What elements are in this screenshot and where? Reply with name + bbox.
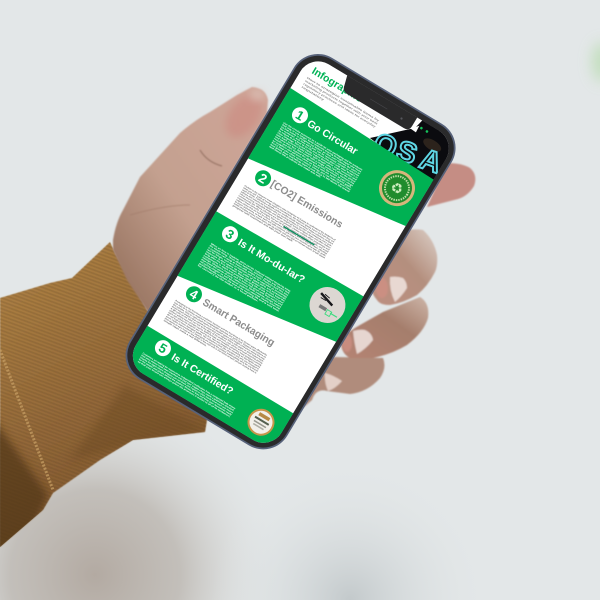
neon sign photo: O [369,127,401,165]
number 2 badge: 2 [256,170,270,187]
body text 3: product finally reaches the end of its working life and is sent back [198,262,280,313]
body text 3: When an item is modular, parts can be replaced without throwing away [210,242,292,293]
panel 4: smart packaging [164,286,274,374]
body text 2: running costs too. Where reductions are not yet possible, choose credible offset programmes and [238,194,331,252]
intro text [302,76,380,128]
body text 3: the whole thing. Think about batteries, screens, straps and covers that [209,244,290,295]
body text 5: Display the logos where shoppers can see them and explain in plain words what each one means [139,356,234,415]
body text 1: as suppliers and partners come on board with the same shared goals. [272,139,353,189]
body text 5: that your claims have been checked and that your supply chain meets a published standard. [141,354,235,412]
body text 2: Small changes across many items add up quickly and give you an honest reason to talk about [233,202,326,259]
body text 2: what you sell. Look at energy used in manufacture, the distance goods travel and how they are [242,186,336,244]
body text 4: Simple steps make a real difference. [163,319,208,348]
body text 3: listings. Shoppers respond well to items that grow with their needs and [202,256,284,307]
panel 2: co2 emissions [232,170,342,258]
body text 4: that wants to earn trust on the shelf, in the mail and in the home of each person buying from it. [164,317,258,375]
heading: smart packaging: Smart Packaging [200,296,277,349]
body text 1: and about the products you make and sell. [268,145,322,179]
intro text: regulatory practices and ideas for everyday [302,82,377,129]
body text 5: so that your brand can always prove the promises it makes to all of its customers. [137,360,231,419]
panel 1: go circular [248,88,434,226]
body text 1: and gives your marketing team a true story to tell about the brand [270,143,351,194]
body text 3 [197,242,292,315]
body text 5: Customers are looking for reassurance. Independent certification from a recognised body shows [142,352,237,411]
body text 3: last for longer, cost less to maintain and can be upgraded as technology [206,248,289,299]
body text 2: vague claims that are hard to check. Consumers and regulators are both paying closer attention [235,198,328,256]
body text 1 [268,122,364,196]
intro text: How to strategize sustainable items by [306,76,381,123]
finger three [303,357,384,408]
badge: recycle seal: ♻ [387,179,406,199]
number 3 badge: 3 [223,226,237,243]
phone screen [132,61,449,443]
badge: modular product photo [310,287,346,323]
neon sign photo: S [392,135,421,171]
body text 4: A QR code on the label can link to the story of the product, care advice and local recycling points [170,307,264,365]
body text 3: for recovery by the maker or a local partner. [197,264,259,303]
number 4 badge: 4 [187,286,201,303]
body text 3: that avoid the waste of early replacement. Good modular design makes [201,258,283,309]
badge: recycle seal [379,170,415,206]
body text 1: take-back schemes build loyalty with people who care about the planet [276,133,356,183]
neon sign photo: A [416,143,446,180]
fingertip behind phone top [427,163,475,207]
body text 4: Packaging is the first thing a customer touches and the first thing to be thrown away afterwards. [175,299,268,357]
body text 2 [232,184,337,262]
body text 2: Carbon is the measure most shoppers now recognise so it pays to understand the footprint of [244,184,336,242]
body text 1: Use the circular economy as a guide for your packaging and for products [283,122,364,172]
number 1 badge: 1 [293,107,307,124]
body text 1: so that waste is designed out before an item ever reaches the store or [280,125,361,176]
neon sign photo [370,120,449,184]
heading: go circular: Go Circular [305,118,360,157]
body text 1: clear language. Recycled inputs reduce demand for virgin resources and [277,131,358,182]
body text 2: used at home. Publishing a simple carbon number beside each product helps customers compare [241,188,334,246]
body text 4: Avoid mixed plastics that cannot be separated and replace fillers with paper or plant based foam. [171,305,265,363]
body text 2: explain them honestly. Set targets that can be tracked, report on progress in public, and avoid [237,196,330,254]
heading: is it modular: Is It Mo-du-lar? [236,237,307,286]
hand: palm and thumb [113,87,270,312]
body text 4: back and reduce the material you need to buy. Test new designs for durability so that lighter packs [168,311,262,369]
body text 1: to nature at the end of its life and share that plan with your buyers in [278,129,359,180]
heading: is it certified: Is It Certified? [169,351,235,398]
body text 1: Every loop you close saves money, energy and raw material over time [271,141,352,192]
body text 3: improves. It also opens up new sales of spare parts and accessories [205,250,287,301]
body text 5: for the people and places behind the product. Renew on time and keep your documents ready [138,358,233,417]
nail three [325,373,342,391]
finger one [372,229,437,305]
intro text: marketing products together with your best [304,79,378,126]
body text 3: recycling simpler as well because materials separate cleanly when the [199,260,281,311]
phone [126,54,456,450]
finger two [341,297,428,358]
heading: co2 emissions: [CO2] Emissions [268,178,345,231]
phone notch [344,76,418,130]
body text 4: since visible improvements in packaging are among the easiest sustainability wins for any brand [165,315,259,373]
body text 3: long after the first purchase. Make repair guides easy to find, keep the [204,252,286,303]
body text 3: components in stock and promote the long life of the product in your [203,254,284,305]
body text 4 [163,299,269,377]
body text 4: do not lead to more damaged goods. Tell customers what you changed and why you changed it, [166,313,260,371]
blurred green plant [592,42,600,82]
body text 3: a customer can swap at home with simple tools. Products built this way [208,246,290,297]
body text 1: that stay in use longer. Keep materials moving through repair and reuse [281,123,363,174]
body text 2: options and rewards the suppliers who are working hardest to cut their own emissions every year. [240,190,333,248]
phone frame [115,44,466,460]
body text 1: and what they buy. Start small with a single product line, measure the [274,135,356,186]
body text 2: progress with customers and with your own staff. [232,204,294,243]
panel 3: is it modular [178,211,364,342]
sweater sleeve [0,242,208,548]
fingers behind phone right [303,229,437,408]
highlight underline [283,226,315,246]
title: Infographic [310,65,365,105]
body text 2: Local sourcing, renewable power and lighter freight all bring the figure down and often reduce [239,192,332,250]
body text 1: the customer. Ask how each part can be recovered, remade or returned [279,127,360,178]
number 5 badge: 5 [156,340,170,357]
body text 1: results and then expand the approach across the whole of your range [273,137,354,188]
body text 4: Use less of it, choose recycled or compostable materials and print clear disposal instructions on [173,301,267,359]
intro text: regulatory [301,85,326,102]
panel 5: is it certified [132,326,294,443]
badge: certification seal [248,408,274,436]
body text 4: the outside. Ship in right sized boxes to cut wasted space and freight emissions along the way. [172,303,266,361]
body text 4: without adding more printed inserts. Refill formats and reusable containers keep shoppers coming [169,309,263,367]
body text 2: to green statements, so back each one with evidence and keep your records up to date for audit. [234,200,327,258]
